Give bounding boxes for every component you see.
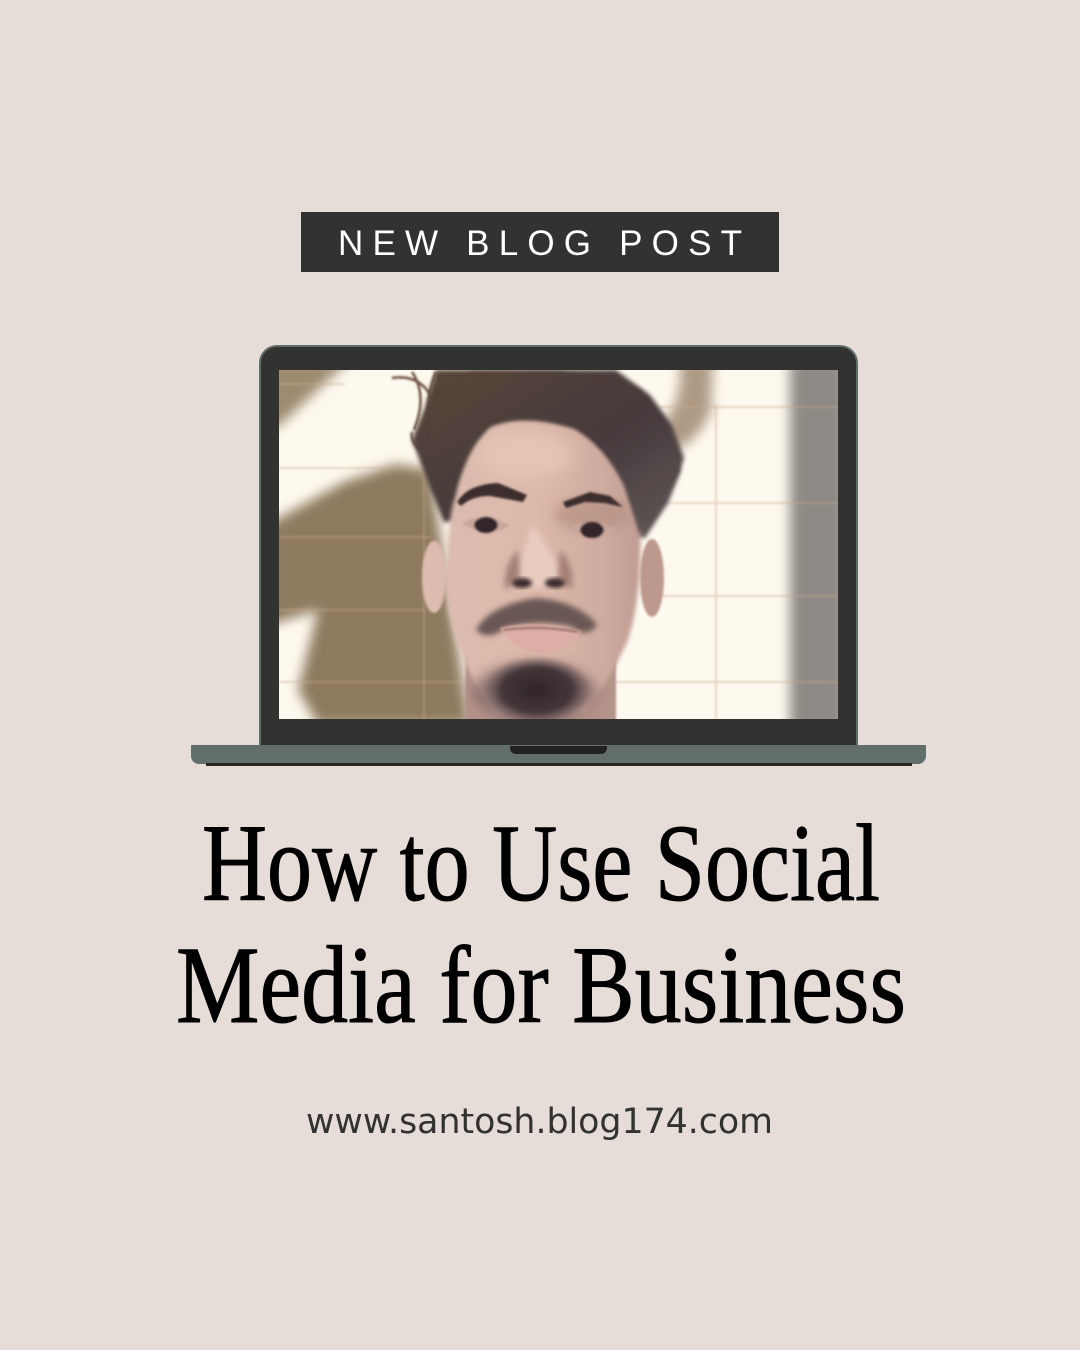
laptop screen photo: portrait (265, 360, 846, 730)
right ear (640, 539, 664, 617)
neck (464, 659, 618, 719)
wall tile lines (279, 384, 838, 719)
laptop lid (260, 346, 857, 746)
left ear (422, 541, 446, 613)
hair (412, 370, 684, 538)
laptop illustration (191, 346, 926, 766)
eye socket shadow (553, 502, 626, 530)
nose (505, 525, 572, 590)
chin stubble (473, 662, 597, 722)
mustache (476, 598, 597, 636)
fringe (430, 372, 680, 535)
eyes (462, 517, 617, 538)
wall shadows (265, 360, 846, 730)
title: How to Use Social (202, 802, 880, 924)
title (176, 802, 906, 1046)
goatee (486, 656, 589, 719)
laptop base (191, 745, 926, 764)
lips (500, 625, 581, 653)
badge: new blog post: NEW BLOG POST (338, 224, 742, 263)
title: Media for Business (176, 924, 906, 1046)
laptop base shadow (206, 763, 912, 766)
eyebrows (457, 483, 623, 508)
face (445, 419, 641, 712)
laptop notch (510, 746, 607, 754)
wild hair strands (390, 370, 438, 450)
website url: www.santosh.blog174.com (306, 1102, 773, 1142)
badge: new blog post (301, 212, 779, 272)
forehead light (472, 436, 572, 474)
